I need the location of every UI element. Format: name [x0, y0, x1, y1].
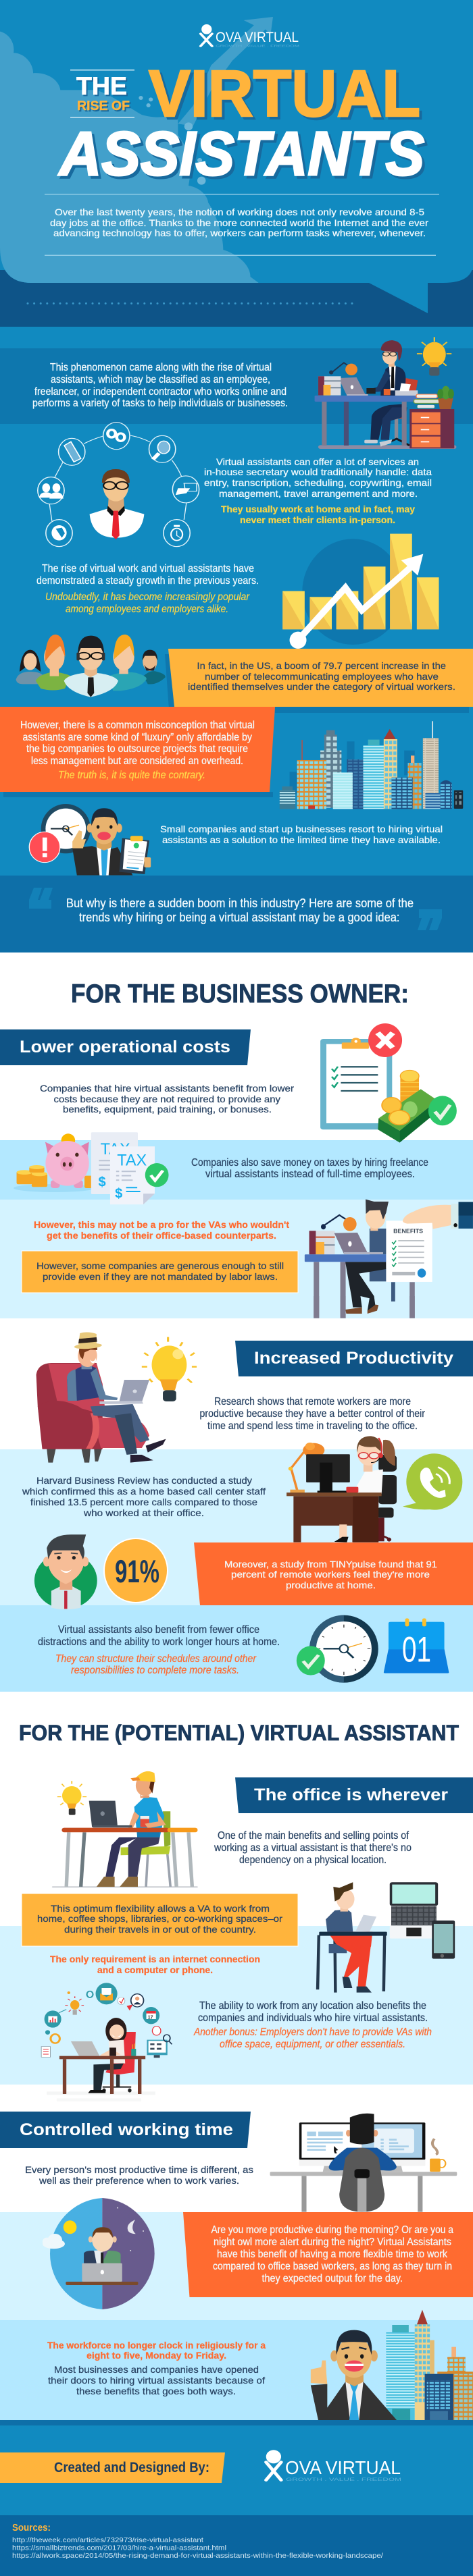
text: workforce: Most businesses and companies have opened: [54, 2365, 259, 2375]
sources list: https://allwork.space/2014/05/the-rising-demand-for-virtual-assistants-within-the-flexible-working-landscape/: [12, 2552, 383, 2560]
text: phenomenon: This phenomenon came along with the rise of virtual: [50, 362, 272, 373]
text: physical location: One of the main benefits and selling points of: [218, 1830, 409, 1842]
title: The Rise of Virtual Assistants: ASSISTANTS: [58, 119, 424, 188]
section banner: increased productivity: Increased Productivity: [254, 1349, 453, 1368]
panel: yellow statistic box: [165, 649, 473, 709]
panel: footer background: [0, 2420, 473, 2576]
text: steady growth: Undoubtedly, it has become increasingly popular: [45, 591, 250, 603]
illustration: man on armchair with laptop and bulb: [36, 1333, 197, 1463]
text: small companies: assistants as a solution to the limited time they have available.: [162, 835, 441, 845]
panel: tax band: [0, 1140, 473, 1200]
illustration: piggy bank and tax forms: $: [99, 1175, 106, 1189]
illustration: man at desk receiving benefits document: [305, 1200, 473, 1318]
illustration: piggy bank and tax forms: [14, 1132, 169, 1204]
callout: optimum flexibility: [22, 1894, 298, 1946]
text: VAs benefits warning: get the benefits of their office-based counterparts.: [47, 1231, 276, 1241]
panel: orange morning or night box: they expected output for the day.: [262, 2273, 403, 2284]
intro text block: [45, 194, 439, 256]
section banner: increased productivity: [235, 1341, 473, 1376]
panel: white page background lower: [0, 952, 473, 2421]
panel: workforce band: [0, 2320, 473, 2420]
sources list: Sources:: [12, 2522, 51, 2533]
panel: phenomenon band: [0, 348, 473, 424]
logo: OVA Virtual footer: [266, 2450, 401, 2482]
credit banner: Created and Designed By:: [54, 2460, 209, 2475]
text: ability to work from any location: companies and individuals who hire virtual assistants.: [198, 2012, 428, 2024]
heading: for the potential virtual assistant: FOR THE (POTENTIAL) VIRTUAL ASSISTANT: [19, 1721, 459, 1745]
text: ability to work from any location: Another bonus: Employers don't have to provide VAs with: [193, 2027, 432, 2038]
text: only requirement: and a computer or phone.: [97, 1965, 213, 1975]
illustration: woman at desk with floating icons: 17: [148, 2015, 153, 2020]
panel: benefits band: [0, 1200, 473, 1318]
text: 79.7 percent: identified themselves under the category of virtual workers.: [188, 682, 455, 692]
panel: page background blue: [0, 0, 473, 952]
panel: orange morning or night box: night owl more alert during the night? Virtual Assistants: [214, 2236, 451, 2248]
text: Harvard study: finished 13.5 percent more calls compared to those: [30, 1497, 257, 1507]
text: misconception: However, there is a common misconception that virtual: [20, 720, 255, 731]
text: Harvard study: who worked at their office.: [83, 1508, 204, 1518]
panel: orange morning or night box: have this benefit of having a more flexible time to work: [217, 2249, 448, 2260]
text: fewer distractions: Virtual assistants also benefit from fewer office: [58, 1624, 259, 1636]
text: services: Virtual assistants can offer a lot of services an: [216, 457, 419, 467]
illustration: clock with check and calendar: [297, 1615, 449, 1683]
text: misconception: the big companies to outsource projects that require: [26, 743, 248, 755]
illustration: woman at desk with floating icons: [41, 1983, 172, 2101]
logo: OVA Virtual header: GROWTH . VALUE . FREEDOM: [216, 45, 299, 47]
text: research shows: Research shows that remote workers are more: [214, 1396, 411, 1407]
text: Harvard study: which confirmed this as a home based call center staff: [22, 1486, 266, 1497]
text: 79.7 percent: number of telecommunicating employees who have: [205, 672, 439, 682]
sources list: http://theweek.com/articles/732973/rise-virtual-assistant: [12, 2536, 203, 2544]
illustration: smiling man on green circle: [34, 1534, 97, 1609]
callout: generous companies: provide even if they are not mandated by labor laws.: [43, 1272, 278, 1282]
section banner: controlled working time: [0, 2112, 251, 2148]
text: misconception: less management but are considered an overhead.: [31, 755, 243, 767]
section banner: lower operational costs: Lower operational costs: [20, 1038, 230, 1056]
illustration: man at office desk with light bulb: [315, 337, 456, 449]
illustration: piggy bank and tax forms: TAX: [117, 1152, 147, 1170]
panel: orange TINYpulse box: percent of remote workers feel they're more: [231, 1569, 430, 1580]
title: The Rise of Virtual Assistants: THE: [76, 72, 127, 100]
illustration: piggy bank and tax forms: $: [115, 1186, 122, 1201]
text: services: management, travel arrangement and more.: [219, 489, 418, 499]
text: phenomenon: performs a variety of tasks to help individuals or businesses.: [32, 398, 288, 409]
text: misconception: The truth is, it is quite the contrary.: [58, 770, 205, 781]
heading: for the business owner: FOR THE BUSINESS OWNER:: [71, 980, 409, 1009]
text: phenomenon: freelancer, or independent contractor who works online and: [34, 386, 287, 398]
text: Harvard study: [22, 1476, 266, 1518]
panel: clock and calendar band: [0, 1605, 473, 1692]
text: boom question: trends why hiring or being a virtual assistant may be a good idea:: [79, 910, 400, 924]
illustration: man at desk with devices: [318, 1882, 455, 1993]
illustration: worker from behind at monitor: [270, 2114, 457, 2212]
text: workforce: eight to five, Monday to Friday.: [86, 2351, 226, 2361]
panel: orange morning or night box: [183, 2212, 473, 2297]
credit banner: [0, 2452, 225, 2483]
text: physical location: [214, 1830, 412, 1866]
logo: OVA Virtual header: [201, 24, 299, 47]
logo: OVA Virtual header: OVA VIRTUAL: [216, 30, 299, 45]
panel: orange misconception box: [0, 707, 469, 797]
text: workforce: The workforce no longer clock in religiously for a: [47, 2340, 266, 2351]
intro text block: advancing technology has to offer, workers can perform tasks wherever, whenever.: [53, 228, 426, 238]
callout: optimum flexibility: home, coffee shops, libraries, or co-working spaces–or: [37, 1914, 282, 1924]
text: physical location: working as a virtual assistant is that there's no: [214, 1842, 412, 1854]
text: fewer distractions: responsibilities to complete more tasks.: [71, 1665, 239, 1676]
text: ability to work from any location: [193, 2000, 432, 2050]
callout: generous companies: [22, 1251, 298, 1293]
text: services: They usually work at home and in fact, may: [221, 504, 415, 514]
text: steady growth: The rise of virtual work and virtual assistants have: [42, 563, 254, 574]
panel: sudden boom quote band: [0, 876, 473, 952]
illustration: clipboard, money and coins: [320, 1023, 457, 1143]
text: fewer distractions: They can structure their schedules around other: [55, 1653, 257, 1665]
icon: closing quote: [418, 909, 442, 930]
text: misconception: [20, 720, 255, 781]
text: small companies: [160, 824, 443, 845]
text: phenomenon: [32, 362, 288, 409]
illustration: man at desk receiving benefits document: BENEFITS: [393, 1229, 424, 1235]
text: only requirement: [50, 1954, 260, 1975]
text: services: never meet their clients in-person.: [240, 515, 395, 525]
text: ability to work from any location: office space, equipment, or other essentials.: [220, 2039, 405, 2050]
text: services: entry, transcription, scheduling, copywriting, email: [204, 478, 432, 488]
text: boom question: But why is there a sudden boom in this industry? Here are some of the: [66, 896, 414, 910]
text: research shows: productive because they have a better control of their: [200, 1408, 426, 1420]
panel: orange TINYpulse box: Moreover, a study from TINYpulse found that 91: [224, 1559, 437, 1569]
text: steady growth: among employees and employers alike.: [66, 603, 228, 615]
panel: orange TINYpulse box: [194, 1542, 473, 1605]
logo: OVA Virtual footer: OVA VIRTUAL: [285, 2457, 401, 2478]
illustration: city skyline: [280, 721, 463, 809]
intro text block: Over the last twenty years, the notion of working does not only revolve around 8-5: [55, 207, 424, 217]
text: misconception: assistants are some kind of “luxury” only affordable by: [23, 732, 252, 743]
text: fewer distractions: [38, 1624, 280, 1676]
text: productive time: Every person's most productive time is different, as: [25, 2165, 253, 2175]
illustration: call center woman and phone bubble: [287, 1436, 462, 1542]
text: workforce: these benefits that goes both ways.: [76, 2386, 236, 2396]
section banner: lower operational costs: [0, 1029, 251, 1065]
sources list: [12, 2522, 383, 2560]
text: VAs benefits warning: However, this may not be a pro for the VAs who wouldn't: [34, 1220, 289, 1230]
illustration: clock with check and calendar: 01: [402, 1630, 431, 1670]
text: phenomenon: assistants, which may be classified as an employee,: [51, 374, 270, 385]
text: lower costs: costs because they are not required to provide any: [54, 1094, 280, 1104]
panel: hero dark band: [0, 270, 473, 327]
cloud background: [0, 17, 273, 284]
panel: hero speech bubble: [0, 0, 473, 313]
text: research shows: [200, 1396, 426, 1432]
text: VAs benefits warning: [34, 1220, 289, 1241]
text: workforce: their doors to hiring virtual assistants because of: [48, 2376, 265, 2386]
illustration: man in yellow cap at laptop: [52, 1771, 198, 1888]
badge: 91 percent: 91%: [115, 1553, 159, 1589]
illustration: team of call center agents: [16, 635, 166, 697]
illustration: piggy bank and tax forms: TAX: [101, 1140, 130, 1158]
text: workforce: [47, 2340, 266, 2396]
illustration: man with clock, alert and clipboard: [29, 804, 151, 876]
text: ability to work from any location: The ability to work from any location also benefits the: [199, 2000, 426, 2012]
text: only requirement: The only requirement is an internet connection: [50, 1954, 260, 1964]
section banner: controlled working time: Controlled working time: [20, 2120, 233, 2139]
text: physical location: dependency on a physical location.: [239, 1854, 387, 1866]
icon: opening quote: [29, 888, 53, 909]
text: steady growth: demonstrated a steady growth in the previous years.: [36, 575, 259, 587]
title: The Rise of Virtual Assistants: RISE OF: [77, 99, 130, 113]
text: small companies: Small companies and start up businesses resort to hiring virtual: [160, 824, 443, 834]
text: 79.7 percent: In fact, in the US, a boom of 79.7 percent increase in the: [197, 661, 446, 671]
text: lower costs: benefits, equipment, paid training, or bonuses.: [63, 1104, 272, 1115]
callout: optimum flexibility: This optimum flexibility allows a VA to work from: [51, 1904, 270, 1914]
text: productive time: well as their preference when to work varies.: [39, 2176, 239, 2186]
panel: flexibility band: [0, 1926, 473, 2085]
panel: day and night band: [0, 2212, 473, 2320]
text: taxes: virtual assistants instead of full-time employees.: [205, 1169, 415, 1180]
title: The Rise of Virtual Assistants: [58, 57, 424, 188]
logo: OVA Virtual footer: GROWTH . VALUE . FREEDOM: [286, 2477, 401, 2482]
section banner: the office is wherever: [235, 1777, 473, 1813]
text: lower costs: [40, 1083, 294, 1115]
text: lower costs: Companies that hire virtual assistants benefit from lower: [40, 1083, 294, 1094]
sources list: https://smallbiztrends.com/2017/03/hire-a-virtual-assistant.html: [12, 2544, 226, 2552]
intro text block: day jobs at the office. Thanks to the more connected world the Internet and the ever: [50, 218, 428, 228]
decorative dotted row: [28, 302, 355, 304]
text: taxes: Companies also save money on taxes by hiring freelance: [191, 1157, 428, 1169]
illustration: hub of services around a man: [38, 423, 199, 547]
title: The Rise of Virtual Assistants: VIRTUAL: [149, 57, 420, 130]
text: research shows: time and spend less time in traveling to the office.: [207, 1420, 418, 1432]
text: 79.7 percent: [188, 661, 455, 692]
illustration: day and night circle with worker: [43, 2198, 155, 2309]
callout: generous companies: However, some companies are generous enough to still: [36, 1261, 284, 1271]
text: boom question: [66, 896, 414, 924]
panel: call center band: [0, 1449, 473, 1605]
callout: optimum flexibility: during their travels in or out of the country.: [64, 1925, 256, 1935]
bar chart with rising arrow: [282, 534, 439, 649]
section banner: the office is wherever: The office is wherever: [254, 1786, 448, 1804]
text: productive time: [25, 2165, 253, 2186]
text: Harvard study: Harvard Business Review has conducted a study: [36, 1476, 252, 1486]
text: steady growth: [36, 563, 259, 615]
text: services: in-house secretary would traditionally handle: data: [204, 467, 432, 477]
text: fewer distractions: distractions and the ability to work longer hours at home.: [38, 1636, 280, 1648]
illustration: desk legs of benefits man: [314, 1296, 415, 1318]
text: services: [204, 457, 432, 525]
panel: orange TINYpulse box: productive at home.: [286, 1580, 376, 1590]
text: taxes: [191, 1157, 428, 1180]
illustration: pointing businessman and city: [311, 2310, 473, 2420]
badge: 91 percent: [103, 1538, 168, 1603]
